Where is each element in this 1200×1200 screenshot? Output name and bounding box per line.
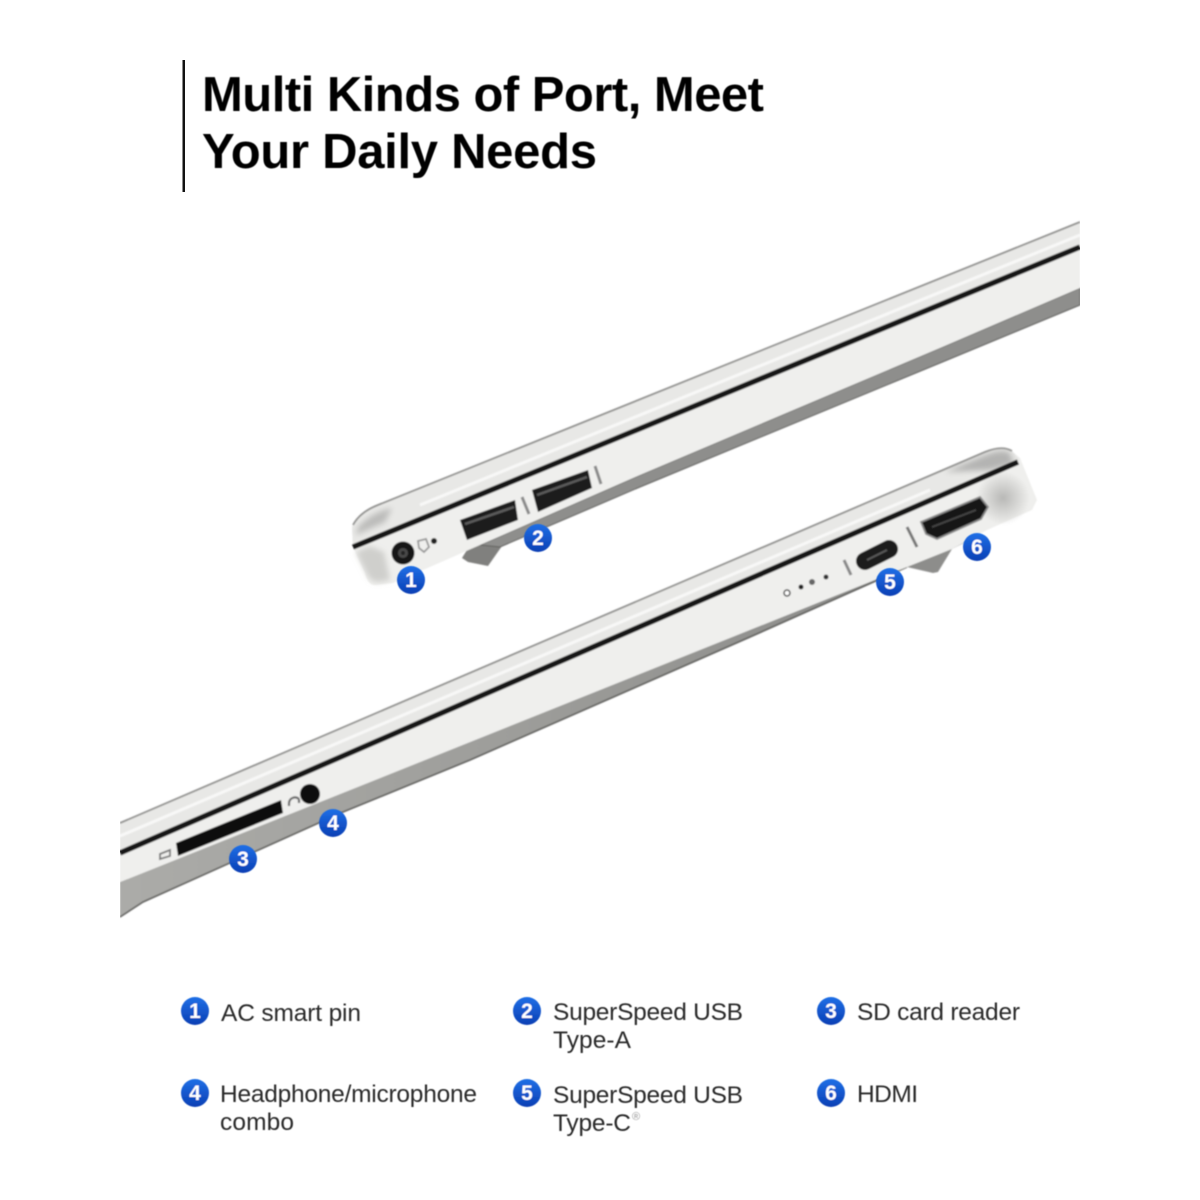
underside dark edge bbox=[120, 567, 907, 917]
legend item 2 bbox=[513, 997, 743, 1054]
port: SD card reader bbox=[176, 800, 283, 856]
power symbol and LED bbox=[418, 538, 437, 552]
callout 6 bbox=[963, 533, 991, 561]
legend item 5: 5 bbox=[521, 1082, 533, 1105]
title: Multi Kinds of Port, Meet bbox=[202, 68, 764, 122]
port: AC smart pin bbox=[392, 542, 414, 564]
legend item 5: SuperSpeed USB bbox=[553, 1082, 743, 1109]
legend item 4: Headphone/microphone bbox=[220, 1081, 477, 1108]
callout 6: 6 bbox=[971, 536, 983, 559]
callout 3 bbox=[229, 845, 257, 873]
underside band bbox=[480, 288, 1080, 547]
legend item 2: SuperSpeed USB bbox=[553, 999, 743, 1026]
legend item 5: ® bbox=[632, 1111, 640, 1123]
legend item 4: 4 bbox=[189, 1082, 201, 1105]
callout 4 bbox=[319, 809, 347, 837]
headphone icon bbox=[289, 797, 299, 806]
lid highlight bbox=[120, 490, 930, 836]
USB markings bbox=[522, 466, 601, 514]
laptop: front side view with SD, headphone, USB-C and HDMI ports bbox=[120, 448, 1037, 917]
lid bbox=[352, 222, 1080, 547]
port: USB-A left bbox=[460, 500, 518, 540]
callouts on laptop bbox=[229, 524, 991, 873]
lid top edge bbox=[353, 222, 1080, 525]
legend bbox=[181, 997, 1020, 1137]
port: USB-C bbox=[865, 549, 889, 561]
legend item 3: 3 bbox=[825, 1000, 837, 1023]
shell bbox=[120, 448, 1037, 882]
display seam bbox=[353, 247, 1080, 547]
underside band bbox=[120, 567, 907, 917]
lid bbox=[120, 448, 1020, 853]
port: USB-A right bbox=[532, 470, 592, 512]
legend item 4 bbox=[181, 1079, 477, 1136]
hinge wedge bbox=[907, 542, 964, 574]
title accent bar bbox=[182, 60, 185, 192]
right end shading bbox=[980, 476, 1026, 521]
callout 5: 5 bbox=[884, 571, 896, 594]
SD label bbox=[160, 850, 170, 859]
callout 1 bbox=[397, 566, 425, 594]
port: headphone jack bbox=[300, 784, 320, 804]
legend item 5 bbox=[513, 1079, 743, 1137]
port: HDMI bbox=[921, 497, 988, 539]
lid end shading bbox=[945, 451, 1014, 472]
callout 1: 1 bbox=[405, 569, 417, 592]
shell bbox=[352, 222, 1080, 585]
legend item 3: SD card reader bbox=[857, 999, 1020, 1026]
callout 2: 2 bbox=[532, 527, 544, 550]
HDMI label bbox=[907, 527, 917, 547]
legend item 5: Type-C bbox=[553, 1110, 631, 1137]
title bbox=[202, 68, 764, 179]
legend item 2: Type-A bbox=[553, 1027, 632, 1054]
legend item 6: HDMI bbox=[857, 1081, 918, 1108]
laptop: rear side view with power and USB-A ports bbox=[352, 222, 1080, 585]
USB-C symbol bbox=[844, 560, 851, 575]
status LEDs bbox=[784, 574, 828, 596]
callout 3: 3 bbox=[237, 848, 249, 871]
lid highlight bbox=[420, 235, 1080, 505]
callout 4: 4 bbox=[327, 812, 339, 835]
callout 2 bbox=[524, 524, 552, 552]
callout 5 bbox=[876, 568, 904, 596]
title: Your Daily Needs bbox=[202, 125, 597, 179]
legend item 6 bbox=[817, 1079, 918, 1108]
legend item 1: AC smart pin bbox=[221, 1000, 361, 1027]
left end shading bbox=[356, 546, 390, 582]
legend item 1: 1 bbox=[189, 1000, 201, 1023]
legend item 6: 6 bbox=[825, 1082, 837, 1105]
hinge wedge bbox=[462, 544, 502, 567]
legend item 2: 2 bbox=[521, 1000, 533, 1023]
legend item 4: combo bbox=[220, 1109, 294, 1136]
display seam bbox=[120, 462, 1018, 853]
lid top edge bbox=[120, 448, 1012, 823]
